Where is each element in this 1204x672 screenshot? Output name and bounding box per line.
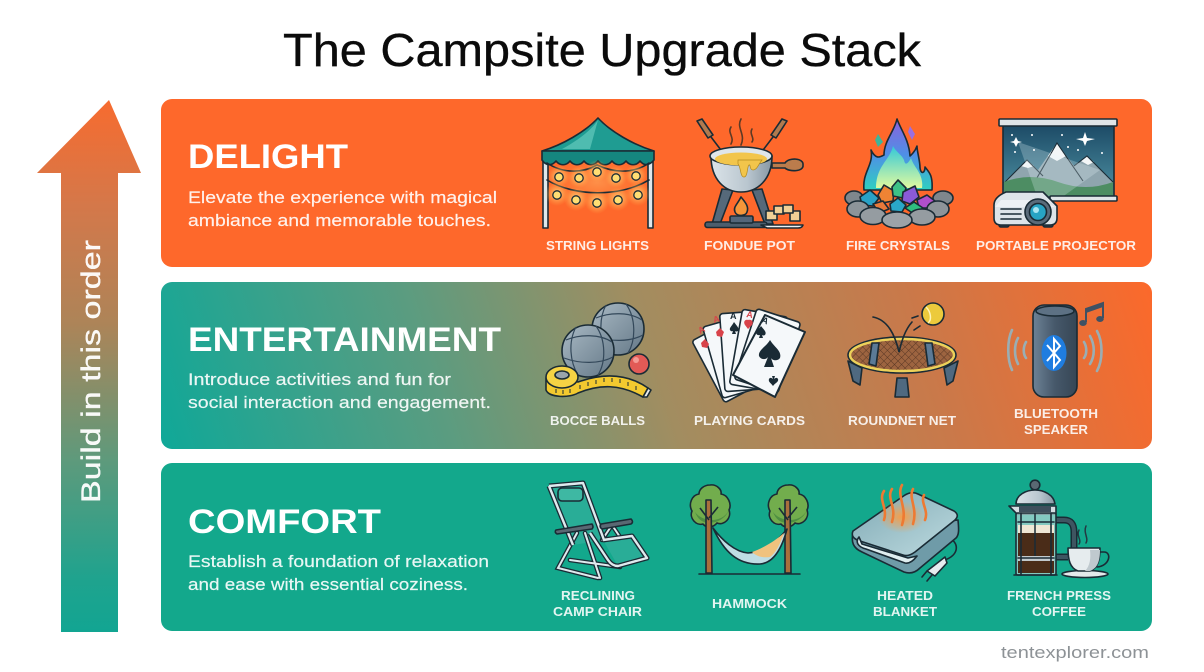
description: comfort: and ease with essential coziness.: [188, 575, 468, 594]
label: fondue pot: FONDUE POT: [704, 238, 795, 253]
description: entertainment: social interaction and engagement.: [188, 393, 491, 412]
icon: playing cards: [692, 309, 805, 403]
label: reclining camp chair: RECLINING: [561, 588, 635, 603]
icon: bocce balls: [546, 303, 651, 397]
heading: delight: DELIGHT: [188, 138, 348, 176]
panel: comfort: [161, 463, 1152, 631]
heading: comfort: COMFORT: [188, 503, 381, 541]
icon: hammock: [690, 485, 808, 574]
description: delight: Elevate the experience with magical: [188, 188, 497, 207]
panel: delight: [161, 99, 1152, 267]
arrow: build order: [37, 100, 141, 632]
label: hammock: HAMMOCK: [712, 596, 788, 611]
label: bluetooth speaker: [1014, 406, 1098, 437]
label: french press coffee: [1007, 588, 1111, 619]
icon: string lights: [542, 118, 654, 228]
label: string lights: STRING LIGHTS: [546, 238, 649, 253]
icon: bluetooth speaker: [1008, 303, 1104, 397]
icon: playing cards: A: [712, 313, 721, 325]
description: entertainment: [188, 370, 491, 412]
description: comfort: Establish a foundation of relaxation: [188, 552, 489, 571]
icon: fire crystals: [845, 119, 953, 228]
icon: heated blanket: [852, 485, 959, 581]
label: heated blanket: [873, 588, 937, 619]
label: reclining camp chair: [553, 588, 643, 619]
heading: entertainment: ENTERTAINMENT: [188, 321, 501, 359]
label: playing cards: PLAYING CARDS: [694, 413, 805, 428]
label: portable projector: PORTABLE PROJECTOR: [976, 238, 1137, 253]
description: entertainment: Introduce activities and fun for: [188, 370, 451, 389]
arrow label: Build in this order: [76, 240, 106, 503]
label: french press coffee: FRENCH PRESS: [1007, 588, 1111, 603]
label: roundnet net: ROUNDNET NET: [848, 413, 956, 428]
label: bluetooth speaker: BLUETOOTH: [1014, 406, 1098, 421]
panel: entertainment: [161, 282, 1152, 449]
label: reclining camp chair: CAMP CHAIR: [553, 604, 643, 619]
description: comfort: [188, 552, 489, 594]
icon: fondue pot: [697, 119, 803, 228]
title: The Campsite Upgrade Stack: [283, 24, 922, 76]
description: delight: ambiance and memorable touches.: [188, 211, 491, 230]
icon: playing cards: A: [730, 311, 737, 321]
label: fire crystals: FIRE CRYSTALS: [846, 238, 950, 253]
icon: playing cards: A: [746, 309, 754, 320]
label: french press coffee: COFFEE: [1032, 604, 1086, 619]
icon: reclining camp chair: [549, 483, 647, 578]
label: heated blanket: BLANKET: [873, 604, 937, 619]
icon: roundnet net: [848, 303, 958, 397]
description: delight: [188, 188, 497, 230]
label: bocce balls: BOCCE BALLS: [550, 413, 645, 428]
icon: portable projector: [994, 119, 1117, 227]
label: heated blanket: HEATED: [877, 588, 933, 603]
label: bluetooth speaker: SPEAKER: [1024, 422, 1089, 437]
icon: french press coffee: [1009, 480, 1109, 578]
icon: playing cards: A: [696, 324, 707, 336]
watermark: tentexplorer.com: [1001, 643, 1149, 662]
icon: playing cards: A: [760, 315, 771, 327]
